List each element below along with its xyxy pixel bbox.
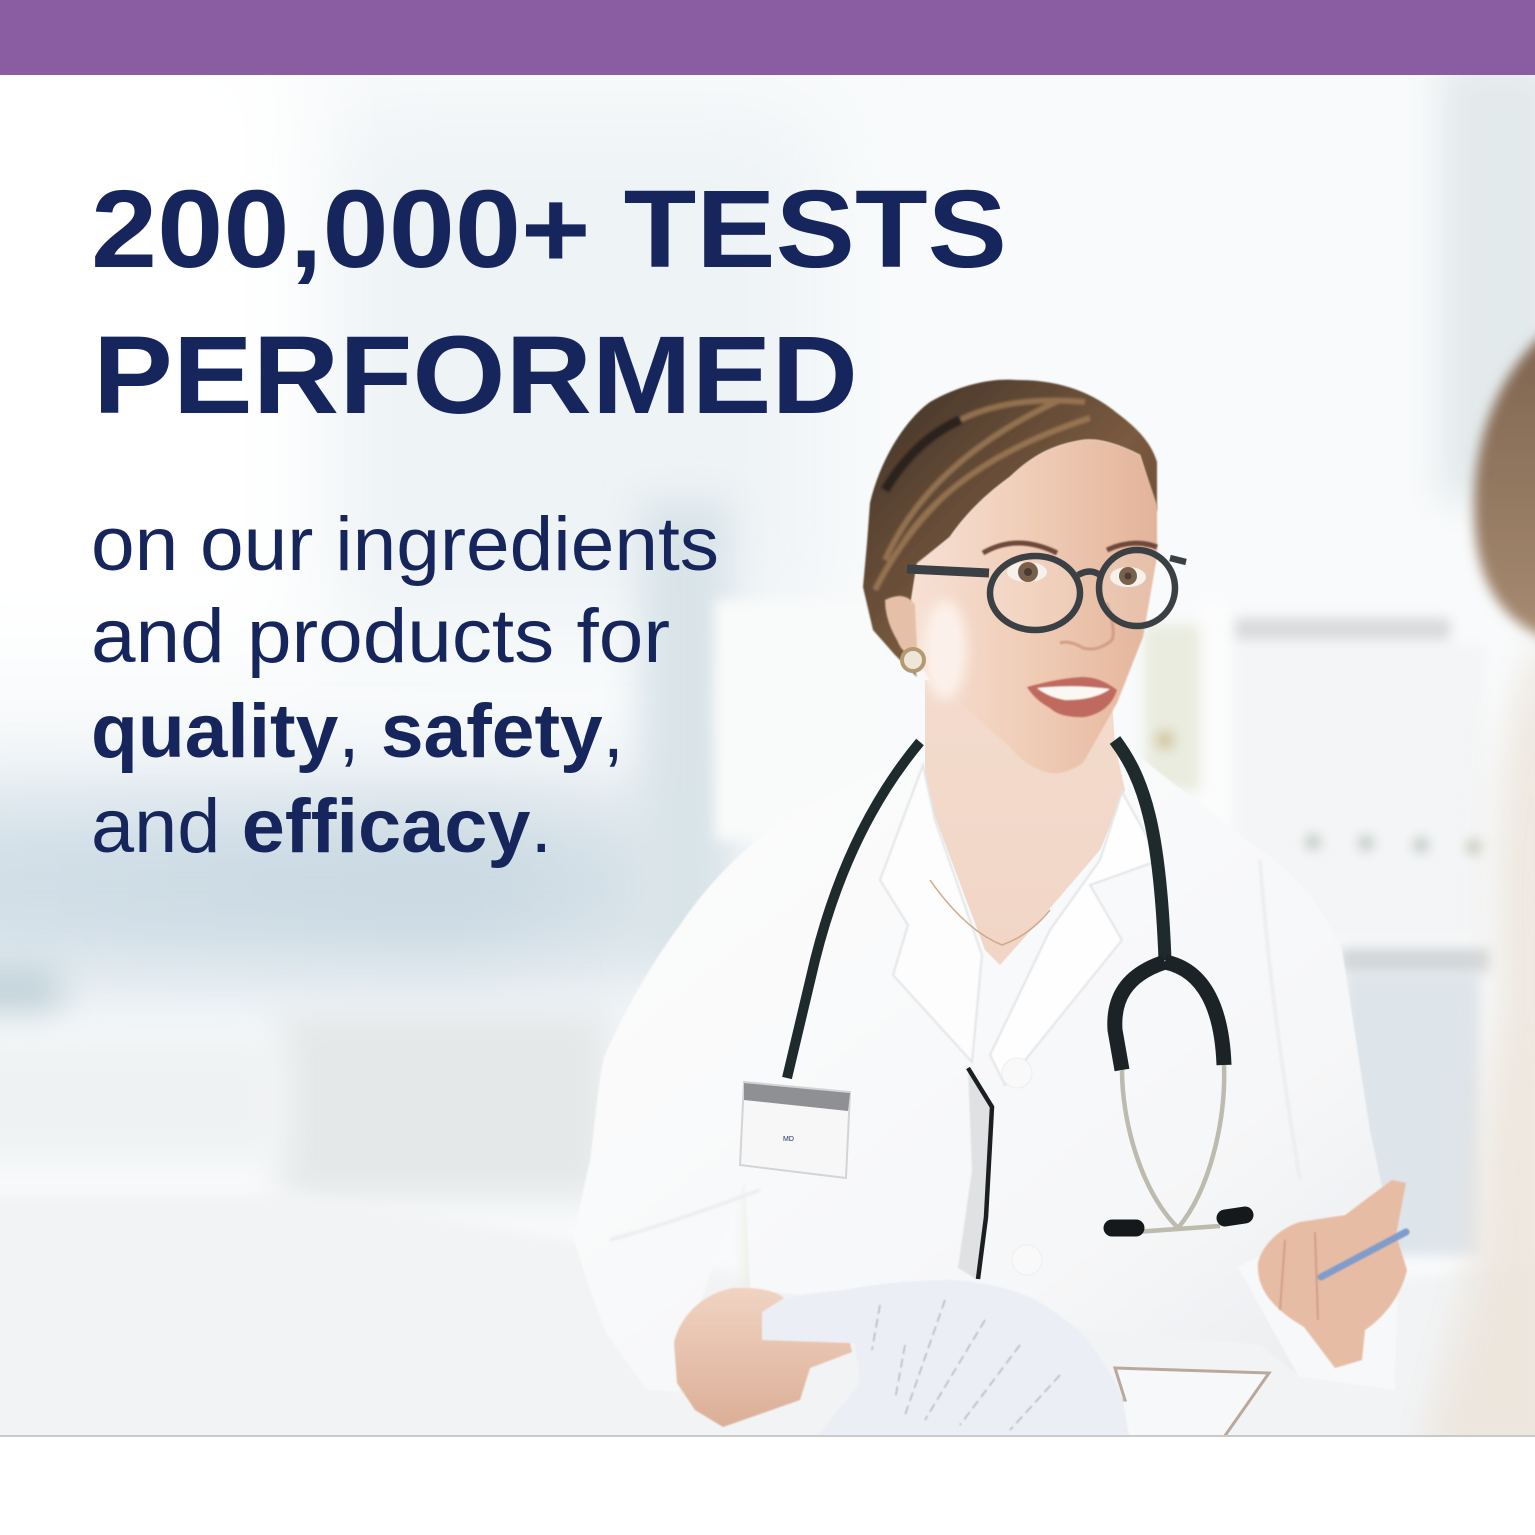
necklace — [930, 880, 1050, 945]
clipboard — [817, 1368, 1269, 1440]
mouth — [1027, 677, 1117, 717]
shirt placket line — [968, 1068, 992, 1279]
right sleeve cuff — [1238, 1200, 1398, 1390]
face — [905, 440, 1157, 773]
gap between arm and torso — [742, 1188, 750, 1286]
coat buttons — [1002, 1058, 1042, 1275]
paper document — [762, 1280, 1129, 1436]
cheek highlight — [923, 600, 967, 700]
headline: 200,000+ TESTS — [91, 168, 1007, 291]
body copy: and products for — [91, 594, 670, 679]
headline — [91, 168, 1007, 437]
id badge: MD — [783, 1136, 794, 1143]
headline: PERFORMED — [93, 314, 858, 437]
doctor figure — [573, 380, 1407, 1440]
nose — [1060, 603, 1113, 649]
white desk — [0, 1195, 1535, 1460]
inner shirt — [958, 1073, 990, 1280]
body copy: quality, safety, — [91, 689, 624, 774]
blurred white shelves — [715, 600, 1490, 1255]
hair — [863, 380, 1157, 677]
coat right lapel — [990, 792, 1160, 1085]
hair highlights — [875, 400, 1090, 590]
left hand — [674, 1288, 852, 1427]
coat left lapel — [880, 765, 982, 1062]
eyes and brows — [983, 543, 1157, 587]
stethoscope — [787, 740, 1245, 1232]
lab coat — [582, 760, 1382, 1294]
right hand with pen — [1258, 1180, 1407, 1368]
blurred clinic background — [0, 75, 1535, 1228]
glasses — [907, 550, 1186, 630]
neck and chest — [925, 680, 1125, 965]
top purple banner — [0, 0, 1535, 75]
id badge — [740, 1082, 850, 1178]
ear and earring — [885, 596, 924, 671]
body copy: and efficacy. — [91, 784, 552, 869]
coat folds — [610, 860, 1300, 1240]
photo bottom edge — [0, 1435, 1535, 1437]
body copy — [91, 502, 719, 869]
body copy: on our ingredients — [91, 502, 719, 587]
blurred patient in foreground — [1420, 320, 1535, 1460]
